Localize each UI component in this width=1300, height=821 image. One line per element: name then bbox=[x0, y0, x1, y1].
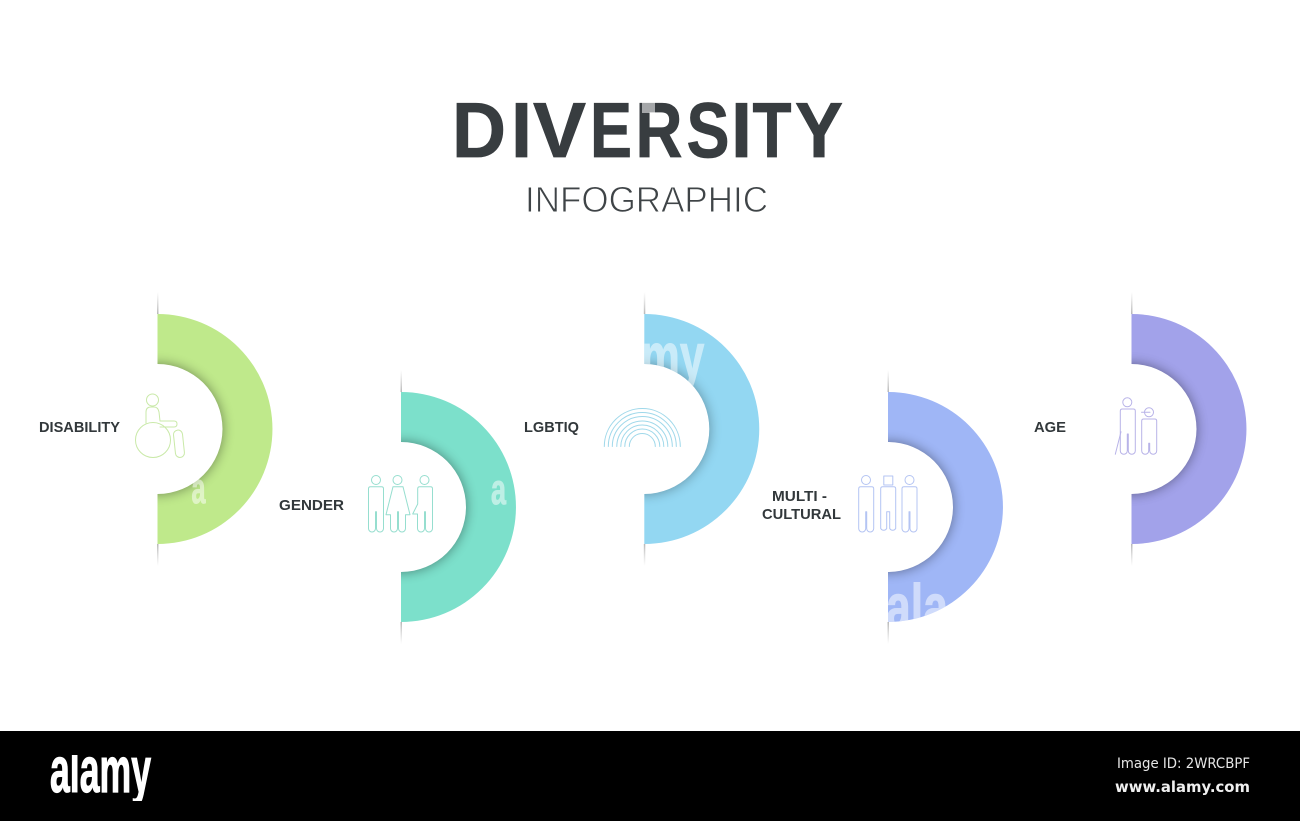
image id: Image ID: 2WRCBPF bbox=[1117, 756, 1250, 772]
half ring: age bbox=[1131, 295, 1246, 563]
title: D bbox=[452, 86, 506, 174]
title: V bbox=[533, 86, 586, 174]
icon: multicultural figures bbox=[859, 476, 917, 532]
label: age: AGE bbox=[1034, 419, 1066, 436]
title: S bbox=[686, 86, 730, 174]
title: T bbox=[752, 86, 792, 174]
icon: gender figures bbox=[368, 476, 433, 532]
half ring: disability bbox=[157, 295, 272, 563]
half ring: lgbtiq bbox=[644, 295, 760, 563]
icon: elder and child bbox=[1115, 398, 1157, 454]
website: www.alamy.com bbox=[1115, 778, 1250, 796]
half ring: multicultural: ala bbox=[886, 571, 948, 643]
footer band bbox=[0, 731, 1300, 821]
title: I bbox=[731, 86, 752, 174]
label: multicultural: CULTURAL bbox=[762, 506, 841, 523]
logo: alamy: alamy bbox=[50, 734, 151, 806]
title: Y bbox=[795, 86, 843, 174]
title bbox=[452, 86, 843, 174]
half ring: lgbtiq: amy bbox=[616, 320, 705, 392]
half ring: disability: a bbox=[192, 465, 206, 513]
half ring: gender: a bbox=[491, 466, 507, 514]
icon: rainbow bbox=[604, 408, 680, 446]
label: disability: DISABILITY bbox=[39, 419, 120, 436]
panel: age bbox=[1034, 292, 1246, 566]
subtitle: INFOGRAPHIC bbox=[525, 179, 768, 220]
panel: gender bbox=[279, 370, 516, 644]
title: R bbox=[636, 86, 682, 174]
label: multicultural: MULTI - bbox=[772, 488, 827, 505]
label: lgbtiq: LGBTIQ bbox=[524, 419, 579, 436]
half ring: multicultural bbox=[888, 373, 1003, 641]
title: I bbox=[511, 86, 532, 174]
panel: lgbtiq bbox=[524, 292, 759, 566]
title: E bbox=[590, 86, 632, 174]
half ring: gender bbox=[400, 373, 516, 641]
panel: multicultural bbox=[762, 370, 1003, 644]
label: gender: GENDER bbox=[279, 497, 344, 514]
icon: wheelchair bbox=[136, 394, 185, 458]
label: multicultural bbox=[762, 488, 841, 523]
panel: disability bbox=[39, 292, 272, 566]
